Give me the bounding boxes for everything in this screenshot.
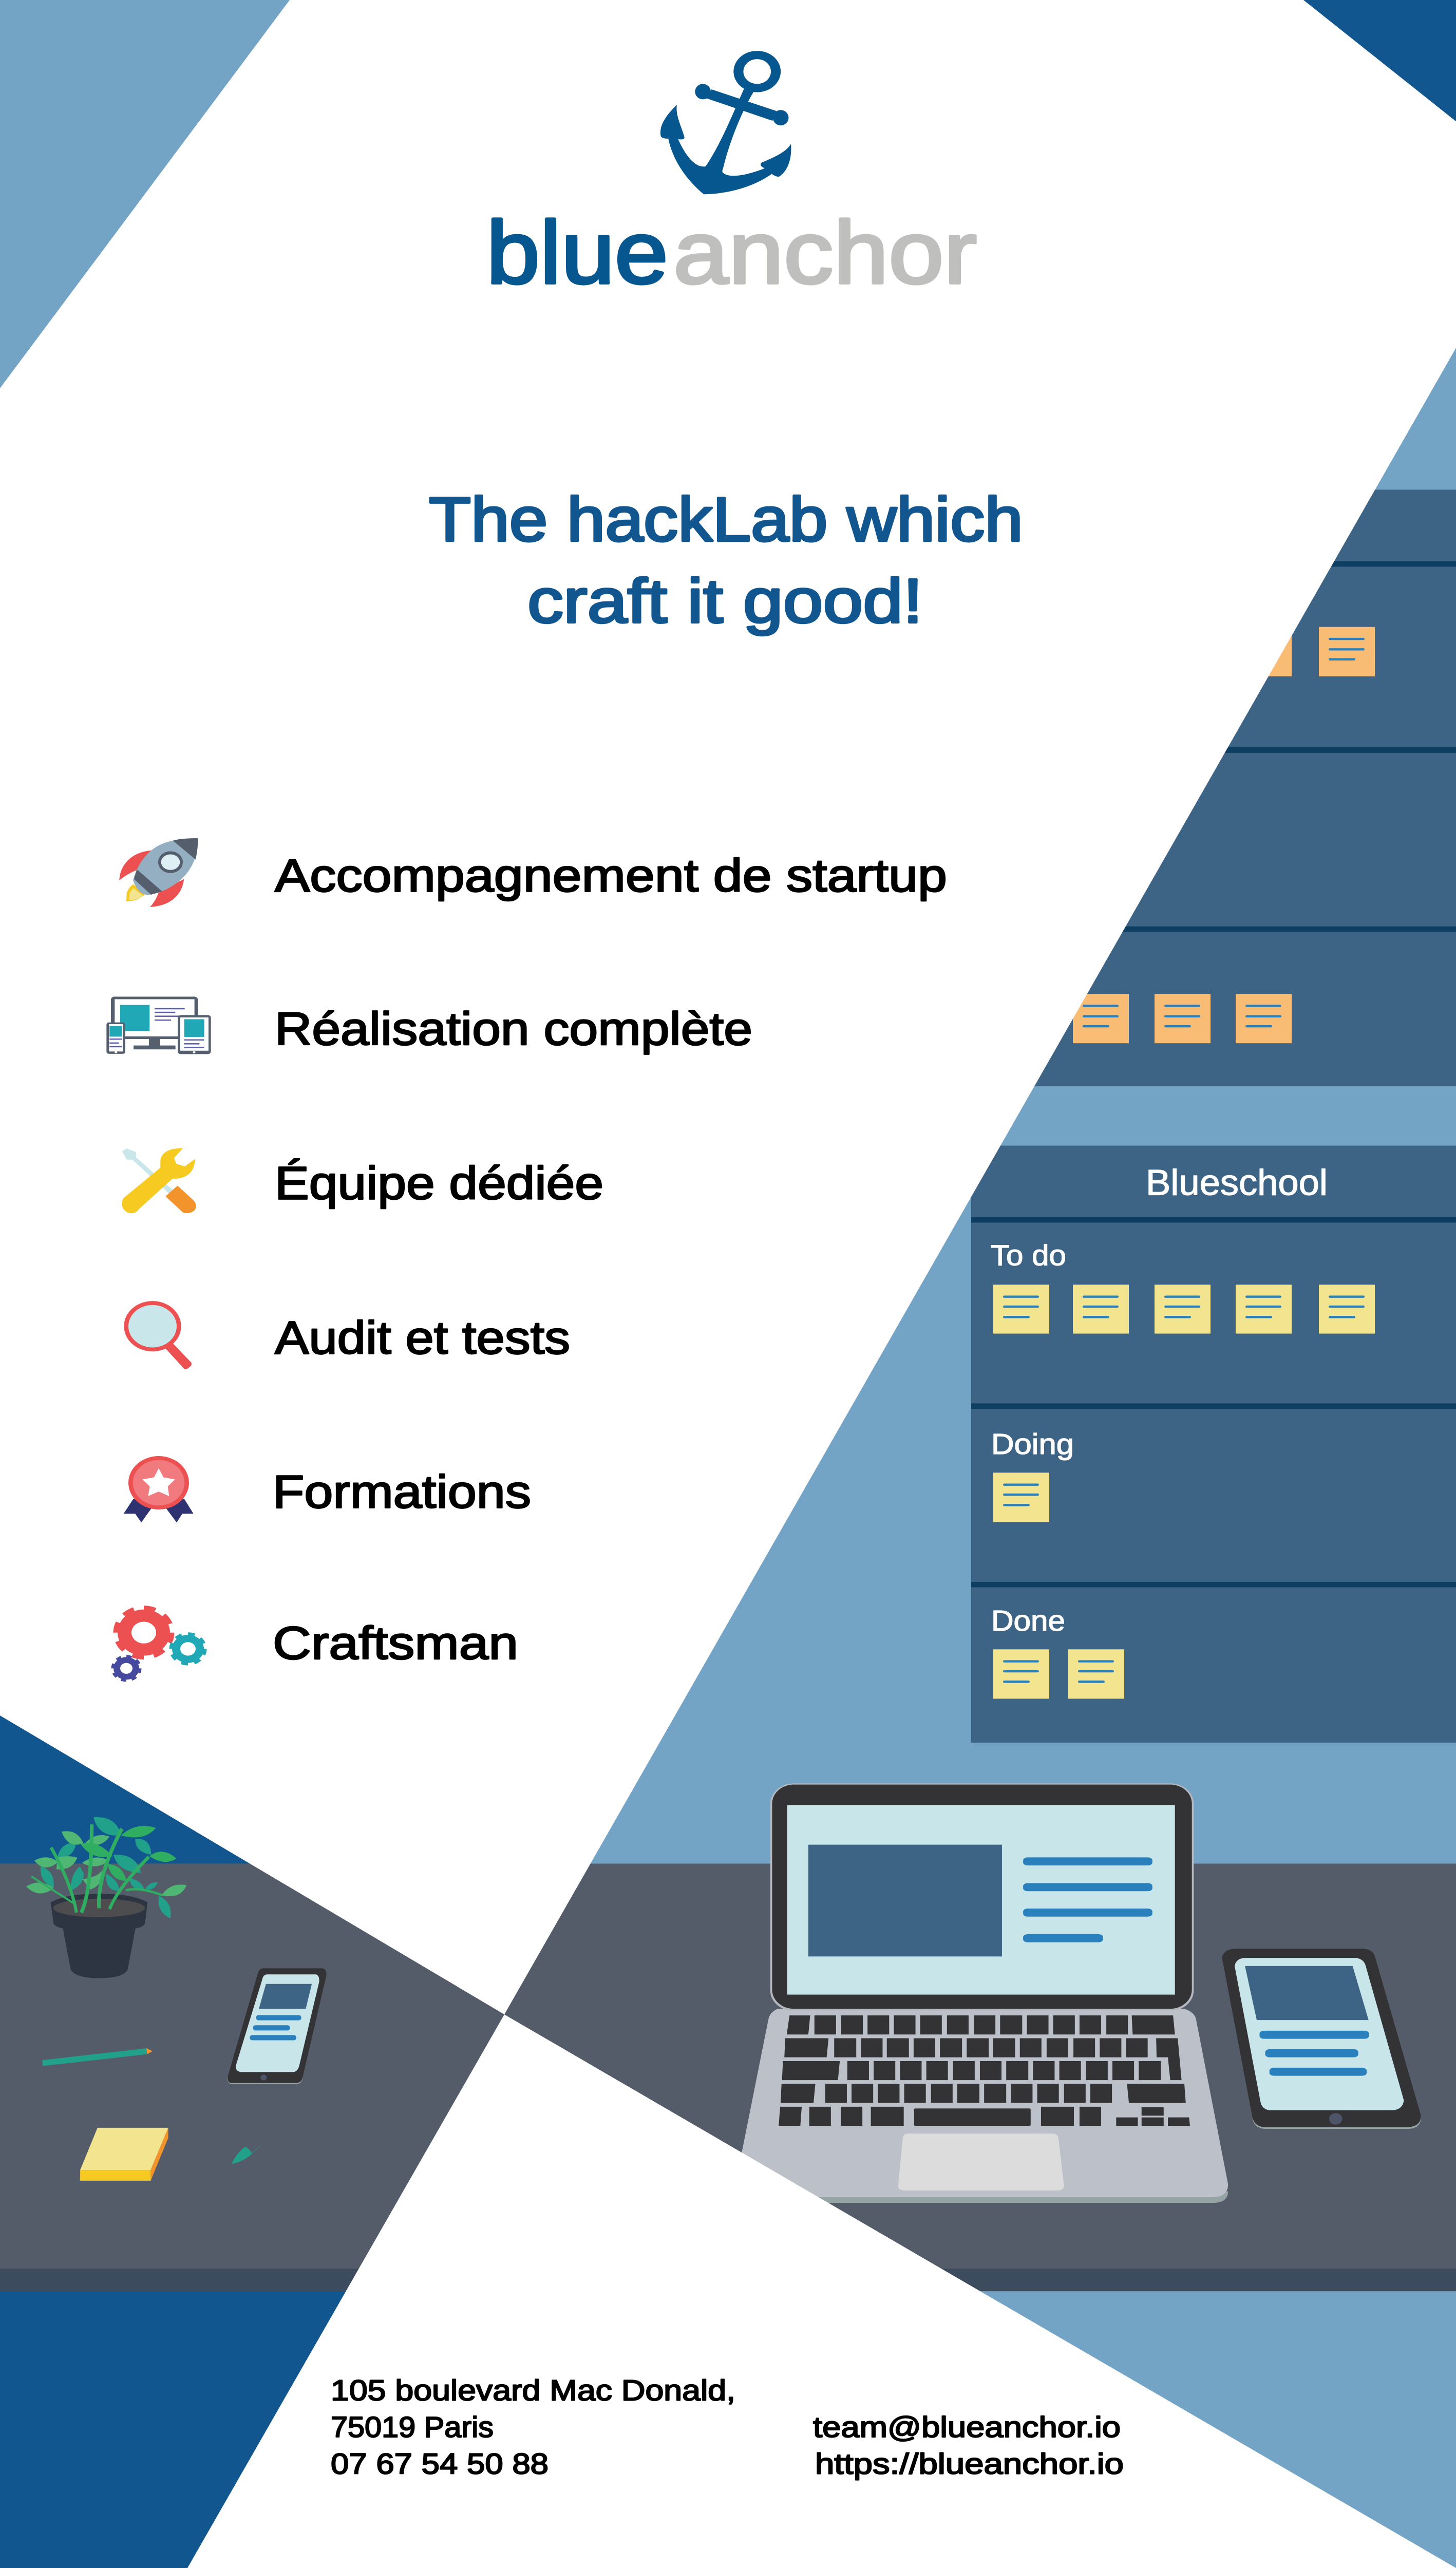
sticky note to do 5 bbox=[1319, 1285, 1375, 1334]
board title: Blueschool bbox=[1146, 1162, 1328, 1203]
service label: Formations bbox=[273, 1466, 531, 1518]
service: équipe dédiée bbox=[122, 1148, 603, 1213]
sticky note orange 2 bbox=[1319, 627, 1375, 676]
contact: email and website bbox=[813, 2411, 1124, 2480]
white upper diagonal panel bbox=[0, 0, 1456, 2014]
sticky note to do 1 bbox=[993, 1285, 1049, 1334]
sticky note done 1 bbox=[993, 1649, 1049, 1698]
service: craftsman bbox=[113, 1609, 518, 1680]
contact: address: 105 boulevard Mac Donald, bbox=[331, 2374, 735, 2407]
icon: magnifier bbox=[124, 1301, 192, 1369]
sticky note orange 5 bbox=[1236, 994, 1292, 1043]
icon: phone on desk bbox=[228, 1968, 326, 2084]
sticky note orange 1 bbox=[1236, 627, 1292, 676]
sticky note doing bbox=[993, 1472, 1049, 1522]
service: audit et tests bbox=[124, 1301, 570, 1369]
icon: gears bbox=[113, 1609, 204, 1680]
desk bbox=[0, 1864, 1456, 2291]
laptop bbox=[735, 1783, 1228, 2203]
service label: Craftsman bbox=[273, 1617, 518, 1669]
service: accompagnement de startup bbox=[119, 838, 947, 907]
service label: Audit et tests bbox=[275, 1312, 570, 1364]
contact: email and website: https://blueanchor.io bbox=[815, 2447, 1124, 2480]
contact: email and website: team@blueanchor.io bbox=[813, 2411, 1121, 2443]
sticky note done 2 bbox=[1068, 1649, 1124, 1698]
bottom left dark blue floor bbox=[0, 2288, 514, 2568]
icon: rocket bbox=[119, 838, 198, 907]
panel: Blueschool kanban board bbox=[971, 1146, 1456, 1743]
column label: doing: Doing bbox=[991, 1428, 1074, 1460]
icon: medal bbox=[124, 1456, 194, 1522]
sticky note orange 3 bbox=[1073, 994, 1129, 1043]
service label: Accompagnement de startup bbox=[275, 850, 947, 901]
contact: address bbox=[331, 2374, 735, 2480]
sticky note orange 4 bbox=[1155, 994, 1211, 1043]
contact: address: 07 67 54 50 88 bbox=[331, 2447, 549, 2480]
icon: devices bbox=[106, 996, 211, 1054]
title: craft it good! bbox=[527, 565, 923, 636]
service label: Équipe dédiée bbox=[275, 1158, 603, 1209]
sticky note to do 3 bbox=[1155, 1285, 1211, 1334]
column label: done: Done bbox=[991, 1604, 1065, 1637]
title bbox=[429, 484, 1023, 636]
logo wordmark: blue: blue bbox=[486, 203, 668, 303]
icon: anchor bbox=[660, 51, 791, 194]
top right corner triangle bbox=[1303, 0, 1456, 121]
icon: potted plant bbox=[26, 1817, 186, 1978]
sticky note to do 2 bbox=[1073, 1285, 1129, 1334]
service: formations bbox=[124, 1456, 531, 1522]
service label: Réalisation complète bbox=[275, 1003, 752, 1055]
logo wordmark: anchor: anchor bbox=[673, 203, 977, 303]
contact: address: 75019 Paris bbox=[331, 2411, 494, 2443]
left dark blue wall bbox=[0, 1676, 514, 1871]
sticky note to do 4 bbox=[1236, 1285, 1292, 1334]
logo bbox=[486, 51, 977, 303]
title: The hackLab which bbox=[429, 484, 1023, 554]
icon: fallen leaf bbox=[232, 2143, 263, 2164]
icon: sticky note pad bbox=[80, 2128, 168, 2181]
white lower diagonal panel bbox=[187, 2014, 1456, 2568]
panel: top kanban board bbox=[770, 489, 1456, 1086]
icon: tools bbox=[122, 1148, 196, 1213]
icon: pencil bbox=[42, 2048, 153, 2066]
tablet on desk bbox=[1222, 1949, 1421, 2129]
service: réalisation complète bbox=[106, 996, 752, 1055]
column label: to do: To do bbox=[991, 1239, 1066, 1272]
